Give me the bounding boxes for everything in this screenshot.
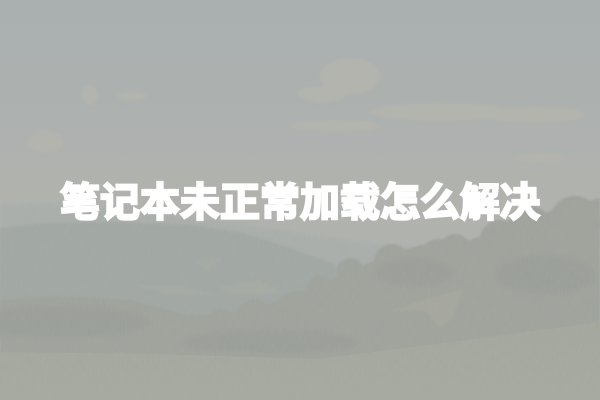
- foreground field: [0, 322, 600, 400]
- darker tree shading: [0, 255, 595, 354]
- clouds: [27, 58, 585, 162]
- tree line: [0, 196, 600, 362]
- field grain texture: [0, 200, 600, 400]
- mid hill: [0, 222, 340, 340]
- far haze band: [0, 203, 420, 300]
- sky: [0, 0, 600, 270]
- meadow patch in trees: [388, 290, 462, 328]
- title: 笔记本未正常加载怎么解决: [60, 181, 540, 225]
